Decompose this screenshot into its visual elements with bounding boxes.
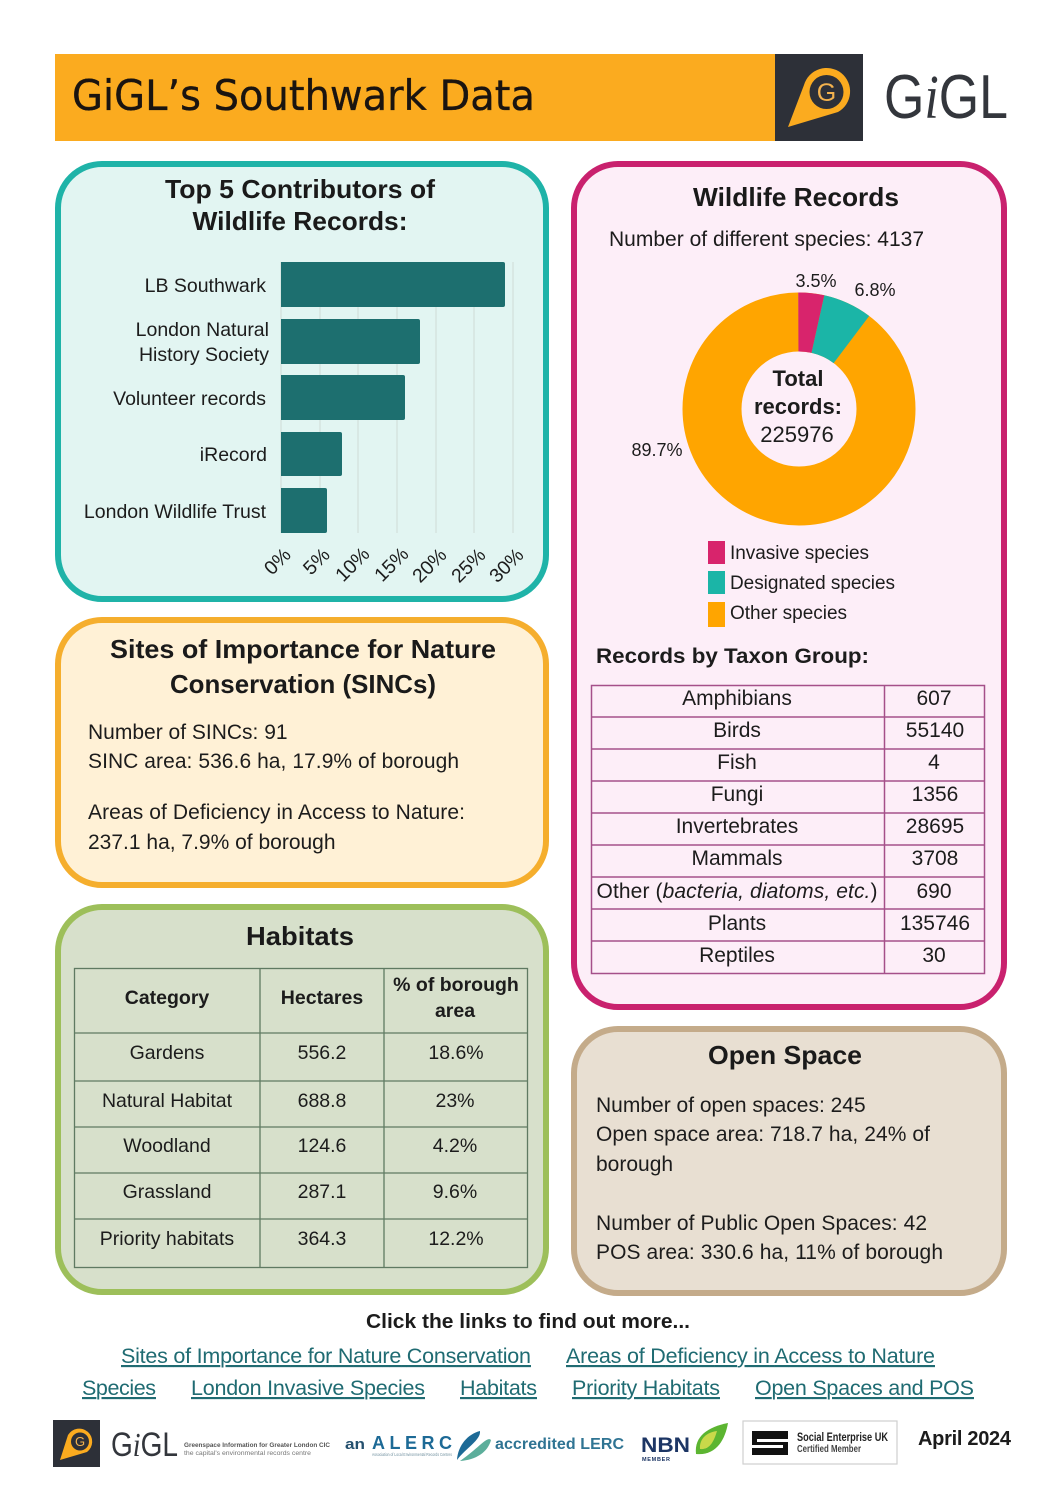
bar chart: contributors: London Wildlife Trust xyxy=(84,501,267,523)
logo: NBN member: NBN xyxy=(641,1434,690,1457)
logo: footer GiGL: G xyxy=(75,1434,85,1449)
heading: records by taxon group: Records by Taxon Group: xyxy=(596,644,869,668)
table: taxon groups: 55140 xyxy=(906,719,964,742)
logo: footer GiGL xyxy=(53,1420,330,1467)
links: London Invasive Species xyxy=(191,1376,425,1400)
donut chart: species records: 6.8% xyxy=(854,280,896,300)
logo: Social Enterprise UK: Social Enterprise UK xyxy=(797,1430,888,1444)
heading: SINCs xyxy=(110,634,496,699)
table: taxon groups: 607 xyxy=(916,687,952,710)
header banner xyxy=(55,54,775,141)
table: taxon groups: Amphibians xyxy=(682,687,792,710)
logo: ALERC accredited LERC: accredited LERC xyxy=(495,1436,624,1453)
logo: ALERC accredited LERC: Association of Local Environmental Records Centres xyxy=(372,1452,453,1457)
text: open space figures: POS area: 330.6 ha, 11% of borough xyxy=(596,1241,943,1264)
table: taxon groups: Invertebrates xyxy=(676,815,798,838)
donut chart: species records: records: xyxy=(754,394,842,419)
text: SINC figures xyxy=(88,721,465,854)
logo: GiGL wordmark: GiGL xyxy=(884,63,1008,132)
text: open space figures: Number of open spaces: 245 xyxy=(596,1094,866,1117)
bar chart: contributors: 10% xyxy=(331,543,374,586)
table: habitats: 23% xyxy=(435,1090,475,1112)
heading: habitats: Habitats xyxy=(246,921,354,951)
text: SINC figures: 237.1 ha, 7.9% of borough xyxy=(88,831,336,854)
links: Species xyxy=(82,1376,156,1400)
panel: wildlife records xyxy=(574,164,1004,1007)
logo: Social Enterprise UK: Certified Member xyxy=(797,1444,861,1455)
text: open space figures: borough xyxy=(596,1153,673,1176)
logo: footer GiGL: Greenspace Information for Greater London CIC xyxy=(184,1442,330,1449)
table: taxon groups: 690 xyxy=(916,880,952,903)
table: habitats: Hectares xyxy=(281,987,363,1009)
logo: ALERC accredited LERC: an xyxy=(345,1436,365,1453)
text: SINC figures: Number of SINCs: 91 xyxy=(88,721,288,744)
table: taxon groups xyxy=(591,685,985,974)
bar chart: contributors: 5% xyxy=(299,544,335,580)
table: taxon groups: 1356 xyxy=(912,783,958,806)
table: taxon groups: Other (bacteria, diatoms, etc.) xyxy=(596,880,878,903)
links: Habitats xyxy=(460,1376,537,1400)
table: taxon groups: Birds xyxy=(713,719,761,742)
panel: open space xyxy=(574,1029,1004,1293)
table: taxon groups: 4 xyxy=(928,751,940,774)
heading: top 5 contributors: Top 5 Contributors of xyxy=(165,174,435,204)
text: number of species: Number of different species: 4137 xyxy=(609,228,924,251)
bar chart: contributors: 30% xyxy=(485,544,528,587)
legend: species type xyxy=(708,541,895,627)
table: taxon groups: 28695 xyxy=(906,815,964,838)
legend: species type: Other species xyxy=(730,603,847,624)
logo: ALERC accredited LERC: ALERC xyxy=(372,1433,452,1453)
table: habitats: 12.2% xyxy=(428,1228,484,1250)
bar chart: contributors: 0% xyxy=(260,544,296,580)
icon: GiGL map pin logo xyxy=(775,54,863,141)
table: habitats: 287.1 xyxy=(298,1181,346,1203)
heading: links prompt: Click the links to find out more... xyxy=(366,1311,690,1333)
title: GiGL’s Southwark Data xyxy=(72,71,535,120)
table: habitats: Woodland xyxy=(123,1135,211,1157)
table: habitats: Priority habitats xyxy=(100,1228,234,1250)
heading: SINCs: Conservation (SINCs) xyxy=(170,669,436,699)
logo: NBN member xyxy=(641,1423,728,1463)
donut chart: species records xyxy=(631,271,896,496)
text: open space figures: Open space area: 718.7 ha, 24% of xyxy=(596,1123,930,1146)
table: habitats: 9.6% xyxy=(433,1181,477,1203)
table: habitats: Gardens xyxy=(130,1042,205,1064)
legend: species type: Invasive species xyxy=(730,543,869,564)
table: habitats: area xyxy=(435,1000,475,1022)
icon: GiGL map pin logo: G xyxy=(817,79,836,107)
panel: top 5 contributors xyxy=(58,164,546,599)
table: habitats: Natural Habitat xyxy=(102,1090,233,1112)
table: taxon groups: 135746 xyxy=(900,912,970,935)
logo: Social Enterprise UK xyxy=(743,1421,897,1464)
bar chart: contributors: London Natural xyxy=(136,319,269,341)
heading: open space: Open Space xyxy=(708,1040,862,1070)
table: habitats: 4.2% xyxy=(433,1135,477,1157)
logo: footer GiGL: GiGL xyxy=(111,1426,178,1464)
links: Priority Habitats xyxy=(572,1376,720,1400)
legend: species type: Designated species xyxy=(730,573,895,594)
panel: habitats xyxy=(58,907,546,1292)
links: Sites of Importance for Nature Conservation xyxy=(121,1344,531,1368)
table: habitats: 124.6 xyxy=(298,1135,346,1157)
table: habitats: Category xyxy=(125,987,209,1009)
bar chart: contributors: 20% xyxy=(408,544,451,587)
bar chart: contributors: LB Southwark xyxy=(145,275,266,297)
text: open space figures: Number of Public Open Spaces: 42 xyxy=(596,1212,927,1235)
logo: footer GiGL: the capital's environmental records centre xyxy=(184,1451,312,1457)
links: Areas of Deficiency in Access to Nature xyxy=(566,1344,935,1368)
donut chart: species records: 225976 xyxy=(760,422,834,447)
table: taxon groups: Plants xyxy=(708,912,766,935)
donut chart: species records: 89.7% xyxy=(631,440,683,460)
text: SINC figures: SINC area: 536.6 ha, 17.9% of borough xyxy=(88,750,459,773)
heading: wildlife records: Wildlife Records xyxy=(693,182,899,212)
bar chart: contributors: iRecord xyxy=(200,444,267,466)
heading: SINCs: Sites of Importance for Nature xyxy=(110,634,496,664)
text: SINC figures: Areas of Deficiency in Access to Nature: xyxy=(88,801,465,824)
table: taxon groups: Fish xyxy=(717,751,757,774)
panel: SINCs xyxy=(58,620,546,885)
table: habitats: 688.8 xyxy=(298,1090,346,1112)
table: taxon groups: Fungi xyxy=(711,783,763,806)
heading: top 5 contributors: Wildlife Records: xyxy=(192,206,408,236)
table: taxon groups: Mammals xyxy=(691,847,783,870)
table: habitats: % of borough xyxy=(393,974,519,996)
table: habitats: 364.3 xyxy=(298,1228,346,1250)
table: habitats xyxy=(74,968,528,1268)
donut chart: species records: 3.5% xyxy=(795,271,837,291)
table: habitats: 18.6% xyxy=(428,1042,484,1064)
table: habitats: 556.2 xyxy=(298,1042,346,1064)
logo: NBN member: MEMBER xyxy=(642,1457,670,1463)
text: open space figures xyxy=(596,1094,943,1264)
table: taxon groups: Reptiles xyxy=(699,944,775,967)
heading: top 5 contributors xyxy=(165,174,435,236)
bar chart: contributors: Volunteer records xyxy=(113,388,266,410)
links: Open Spaces and POS xyxy=(755,1376,974,1400)
bar chart: contributors: 15% xyxy=(370,543,413,586)
bar chart: contributors xyxy=(84,262,528,587)
date: April 2024 xyxy=(918,1428,1012,1450)
donut chart: species records: Total xyxy=(773,366,823,391)
links xyxy=(82,1344,974,1400)
bar chart: contributors: 25% xyxy=(447,544,490,587)
bar chart: contributors: History Society xyxy=(139,344,269,366)
table: habitats: Grassland xyxy=(123,1181,211,1203)
logo: ALERC accredited LERC xyxy=(345,1431,624,1461)
table: taxon groups: 3708 xyxy=(912,847,958,870)
table: taxon groups: 30 xyxy=(922,944,946,967)
